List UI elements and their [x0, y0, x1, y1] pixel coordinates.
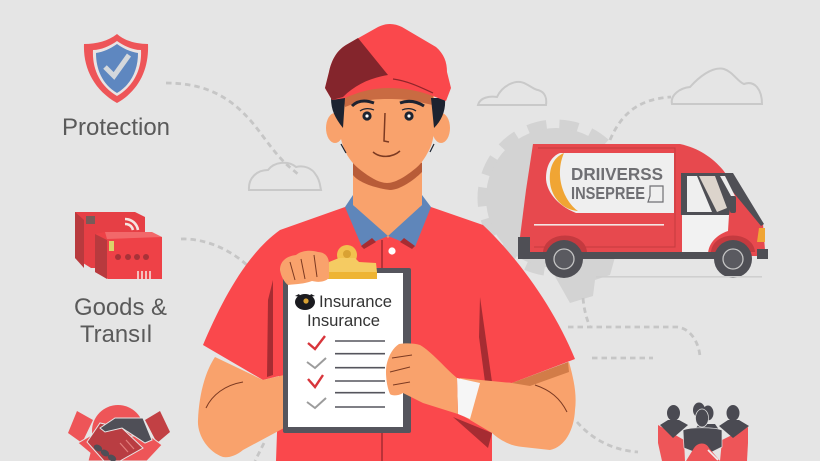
clipboard clip [328, 245, 377, 279]
van mirror [730, 196, 736, 213]
ears [326, 113, 344, 143]
icon: group of people [658, 402, 749, 461]
dashed connectors [166, 83, 700, 461]
icon: protection shield [84, 34, 148, 103]
wristband [457, 378, 480, 419]
label: Protection: Protection [62, 114, 170, 141]
van stripe [534, 224, 664, 226]
van front wheel [714, 240, 752, 278]
clouds [249, 69, 762, 190]
van side panel [546, 153, 674, 213]
clipboard heading: Insurance [307, 312, 380, 330]
van text: INSEPREE [571, 183, 645, 203]
left arm [198, 357, 284, 457]
left hand [280, 251, 329, 285]
face [340, 85, 434, 183]
van headlight [757, 228, 765, 242]
van rear wheel [545, 240, 583, 278]
nose and mouth [373, 113, 400, 156]
right hand [386, 343, 458, 414]
van text: DRIIVERSS [571, 164, 663, 184]
hair [331, 98, 445, 128]
gear behind van [482, 124, 630, 303]
label: Goods & Transit [74, 294, 167, 348]
label: Goods & Transit: Transıl [80, 321, 152, 348]
clipboard heading: Insurance [319, 293, 392, 311]
shirt [203, 207, 575, 461]
man [198, 24, 576, 461]
delivery van [518, 144, 768, 278]
cap [325, 24, 451, 101]
neck [353, 160, 422, 238]
van text [571, 164, 663, 203]
collar [345, 195, 431, 247]
icon: goods boxes [75, 212, 162, 279]
van chassis [518, 237, 768, 259]
clipboard heading [307, 293, 392, 330]
van door [682, 215, 729, 255]
checklist [307, 336, 385, 408]
icon: handshake [68, 405, 170, 461]
label: Goods & Transit: Goods & [74, 294, 167, 321]
clipboard logo [295, 294, 315, 310]
van body [520, 144, 765, 256]
van windows [681, 173, 764, 226]
clipboard [206, 245, 567, 433]
eyebrows and eyes [352, 101, 424, 121]
right arm [460, 362, 576, 450]
